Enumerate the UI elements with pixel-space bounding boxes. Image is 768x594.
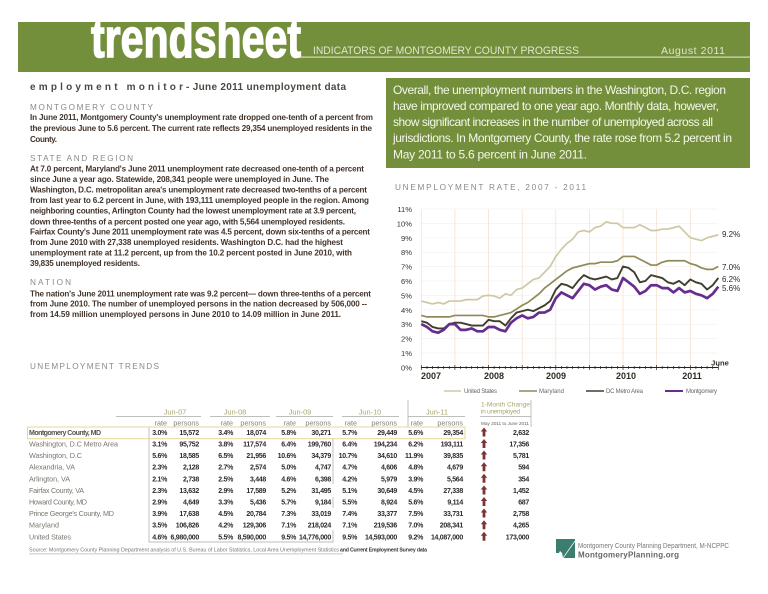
table values: 10.6% <box>278 453 297 460</box>
table values: 34,610 <box>377 453 397 460</box>
table values: 17,356 <box>509 441 529 448</box>
table values: 193,111 <box>441 441 463 448</box>
table values: 2,128 <box>183 465 199 472</box>
column headers: Jun-09 <box>289 408 311 416</box>
row labels: Alexandria, VA <box>29 463 75 472</box>
x axis: 2011 <box>682 371 702 381</box>
table values: 30,649 <box>377 488 397 495</box>
table values: 5.1% <box>342 488 358 495</box>
callout: summary <box>386 78 750 168</box>
table values: 33,731 <box>443 511 463 518</box>
end-of-line value labels: 6.2% <box>722 275 740 284</box>
column headers: persons <box>305 418 331 428</box>
y axis labels: 1% <box>401 349 412 358</box>
table values: 3.3% <box>218 499 234 506</box>
y axis labels: 9% <box>401 234 412 243</box>
line: DC Metro Area <box>421 266 718 328</box>
table values: 5.5% <box>342 499 358 506</box>
table values <box>152 430 529 541</box>
y axis labels: 5% <box>401 291 412 300</box>
text block: Nation: NATION <box>30 278 71 287</box>
line: Maryland <box>421 256 718 317</box>
table values: 5.7% <box>281 499 297 506</box>
header date: August 2011 <box>661 45 725 57</box>
chart legend: United States <box>464 389 497 395</box>
table values: 14,087,000 <box>431 534 463 541</box>
table values: 4,265 <box>513 523 529 530</box>
row labels: Prince George's County, MD <box>29 509 114 518</box>
column headers: rate <box>155 418 167 428</box>
table values: 6.4% <box>342 441 358 448</box>
table values: 9,184 <box>315 499 331 506</box>
chart legend: DC Metro Area <box>606 389 644 395</box>
table values: 5.6% <box>408 499 424 506</box>
table heading: UNEMPLOYMENT TRENDS <box>30 362 160 371</box>
icon: up arrows <box>481 428 487 541</box>
table values: 29,449 <box>377 430 397 437</box>
text block: Nation: from 14.59 million unemployed persons in June 2010 to 14.09 million in June 2011. <box>30 310 341 319</box>
table values: 5.6% <box>408 430 424 437</box>
table values: 2.9% <box>218 488 234 495</box>
table values: 687 <box>518 499 529 506</box>
section heading: employment monitor <box>30 82 183 93</box>
table values: 95,752 <box>179 441 199 448</box>
line chart: unemployment rate <box>395 183 740 395</box>
text block: Nation <box>30 278 371 319</box>
table values: 4.5% <box>408 488 424 495</box>
table values: 14,593,000 <box>365 534 397 541</box>
column headers: persons <box>173 418 199 428</box>
table values: 5.6% <box>152 453 168 460</box>
table values: 9,114 <box>447 499 463 506</box>
table values: 21,956 <box>246 453 266 460</box>
x axis: 2009 <box>546 371 566 381</box>
logo: Montgomery Planning <box>556 539 729 560</box>
column headers: rate <box>221 418 233 428</box>
table values: 1,452 <box>513 488 529 495</box>
text block: State and Region: Fairfax County's June 2011 unemployment rate was 4.5 percent, down six-tenths of a percent <box>30 228 370 237</box>
table values: 2.1% <box>152 476 168 483</box>
end-of-line value labels: 5.6% <box>722 284 740 293</box>
row labels <box>29 430 118 541</box>
column headers: persons <box>240 418 266 428</box>
column headers: Jun-07 <box>164 408 186 416</box>
table values: 10.7% <box>339 453 358 460</box>
table values: 117,574 <box>243 441 266 448</box>
table values: 2.3% <box>152 465 168 472</box>
y axis labels: 10% <box>397 219 412 228</box>
table values: 2,758 <box>513 511 529 518</box>
row labels: Arlington, VA <box>29 474 70 483</box>
text block: State and Region: from last year to 6.2 percent in June, with 193,111 unemployed people in the region. Among <box>30 196 369 205</box>
table values: 7.1% <box>342 523 358 530</box>
end-of-line value labels <box>722 230 740 293</box>
table values: 17,638 <box>179 511 199 518</box>
table values: 8,590,000 <box>238 534 266 541</box>
data lines <box>421 222 718 333</box>
row labels: Maryland <box>29 521 59 530</box>
text block: State and Region: At 7.0 percent, Maryland's June 2011 unemployment rate decreased one-tenth of a percent <box>30 164 364 174</box>
y axis labels: 6% <box>401 277 412 286</box>
text block: State and Region: since June a year ago. Statewide, 208,341 people were unemployed in June. The <box>30 175 329 184</box>
table values: 7.1% <box>281 523 297 530</box>
table values: 5.5% <box>218 534 234 541</box>
text block: Montgomery County <box>30 103 373 144</box>
table values: 3.1% <box>152 441 168 448</box>
chart heading: UNEMPLOYMENT RATE, 2007 - 2011 <box>395 183 586 192</box>
text block: Montgomery County: In June 2011, Montgomery County's unemployment rate dropped one-tenth of a percent from <box>30 113 373 122</box>
text block: Montgomery County: County. <box>30 135 57 144</box>
table values: 3,448 <box>250 476 266 483</box>
header banner <box>18 7 750 72</box>
column headers: Jun-10 <box>359 408 381 416</box>
table values: 7.0% <box>408 523 424 530</box>
table values: 5,979 <box>381 476 397 483</box>
table values: 4,649 <box>183 499 199 506</box>
table values: 5,781 <box>513 453 529 460</box>
title: trendsheet: trendsheet <box>91 7 301 69</box>
table values: 4.8% <box>408 465 424 472</box>
table values: 106,826 <box>176 523 199 530</box>
text block: Montgomery County: the previous June to 5.6 percent. The current rate reflects 29,354 unemployed residents in the <box>30 124 372 133</box>
table values: 3.9% <box>152 511 168 518</box>
table values: 4,747 <box>315 465 331 472</box>
column headers: rate <box>345 418 357 428</box>
table values: 3.4% <box>218 430 234 437</box>
x axis: 2008 <box>484 371 504 381</box>
icon: logo mark <box>556 539 575 558</box>
table values: 594 <box>518 465 529 472</box>
header subtitle: INDICATORS OF MONTGOMERY COUNTY PROGRESS <box>313 45 579 57</box>
y axis labels: 0% <box>401 363 412 372</box>
y axis labels: 4% <box>401 306 412 315</box>
column headers: Jun-08 <box>224 408 246 416</box>
table values: 5.8% <box>281 430 297 437</box>
table values: 4.5% <box>218 511 234 518</box>
y axis labels: 7% <box>401 263 412 272</box>
y axis labels: 3% <box>401 320 412 329</box>
text block: Montgomery County: MONTGOMERY COUNTY <box>30 103 154 112</box>
column headers: rate <box>411 418 423 428</box>
table values: 8,924 <box>381 499 397 506</box>
table values: 6,980,000 <box>171 534 199 541</box>
table values: 9.2% <box>408 534 424 541</box>
table values: 4,679 <box>447 465 463 472</box>
table values: 2.7% <box>218 465 234 472</box>
table values: 33,019 <box>311 511 331 518</box>
table values: 194,234 <box>374 441 397 448</box>
table values: 5,564 <box>447 476 463 483</box>
chart legend: Maryland <box>539 389 564 395</box>
table values: 30,271 <box>311 430 331 437</box>
table values: 9.5% <box>342 534 358 541</box>
table values: 4.6% <box>152 534 168 541</box>
table values: 31,495 <box>311 488 331 495</box>
table values: 13,632 <box>179 488 199 495</box>
column headers: persons <box>437 418 463 428</box>
table values: 4.7% <box>342 465 358 472</box>
text block: Nation: The nation's June 2011 unemployment rate was 9.2 percent— down three-tenths of a percent <box>30 289 371 298</box>
table values: 11.9% <box>405 453 424 460</box>
line: United States <box>421 222 718 304</box>
row labels: Howard County, MD <box>29 497 87 506</box>
table values: 3.8% <box>218 441 234 448</box>
table values: 2.3% <box>152 488 168 495</box>
callout: summary: May 2011 to 5.6 percent in June 2011. <box>393 148 587 162</box>
table values: 27,338 <box>443 488 463 495</box>
text block: State and Region: down three-tenths of a percent posted one year ago, with 5,564 unemployed residents. <box>30 218 345 226</box>
table: unemployment trends <box>28 362 531 555</box>
column headers: May 2011 to June 2011 <box>481 421 529 427</box>
source note: and Current Employment Survey data <box>340 548 427 554</box>
table values: 218,024 <box>308 523 331 530</box>
text block: State and Region <box>30 154 370 268</box>
y axis labels: 11% <box>397 205 412 214</box>
table values: 2,574 <box>250 465 266 472</box>
table values: 5.2% <box>281 488 297 495</box>
table values: 2.5% <box>218 476 234 483</box>
table values: 6.4% <box>281 441 297 448</box>
callout: summary: show significant increases in the number of unemployed across all <box>393 115 713 129</box>
callout: summary: have improved compared to one year ago. Monthly data, however, <box>393 99 719 113</box>
end-of-line value labels: 7.0% <box>722 263 740 272</box>
table values: 2,738 <box>183 476 199 483</box>
column headers <box>155 402 530 428</box>
table values: 4,606 <box>381 465 397 472</box>
table values: 199,760 <box>308 441 331 448</box>
text block: Nation: from June 2010. The number of unemployed persons in the nation decreased by 506,000 -- <box>30 300 367 309</box>
column headers: Jun-11 <box>426 408 448 416</box>
row labels: United States <box>29 532 71 541</box>
table values: 7.4% <box>342 511 358 518</box>
row labels: Fairfax County, VA <box>29 486 84 495</box>
callout: summary: jurisdictions. In Montgomery County, the rate rose from 5.2 percent in <box>392 131 732 145</box>
table values: 4.2% <box>218 523 234 530</box>
table values: 34,379 <box>311 453 331 460</box>
table values: 18,585 <box>179 453 199 460</box>
text block: State and Region: 39,835 unemployed residents. <box>30 259 140 268</box>
table values: 5.7% <box>342 430 358 437</box>
column headers: persons <box>371 418 397 428</box>
column headers: in unemployed <box>481 408 520 416</box>
table values: 129,306 <box>243 523 266 530</box>
table values: 5,436 <box>250 499 266 506</box>
chart legend: Montgomery <box>686 389 717 395</box>
table values: 219,536 <box>374 523 397 530</box>
table values: 354 <box>518 476 529 483</box>
row labels: Montgomery County, MD <box>29 430 101 437</box>
text block: State and Region: STATE AND REGION <box>30 154 133 163</box>
table values: 3.5% <box>152 523 168 530</box>
text block: State and Region: neighboring counties, Arlington County had the lowest unemployment rate at 3.9 percent, <box>30 206 356 216</box>
x axis: 2007 <box>421 371 441 381</box>
end-of-line value labels: 9.2% <box>722 230 740 239</box>
text block: State and Region: unemployment rate at 11.2 percent, up from the 10.2 percent posted in June 2010, with <box>30 249 352 258</box>
table values: 29,354 <box>443 430 463 437</box>
source note <box>29 548 427 555</box>
y axis labels: 2% <box>401 335 412 344</box>
callout: summary: Overall, the unemployment numbers in the Washington, D.C. region <box>393 83 726 97</box>
column headers: 1-Month Change <box>481 402 530 408</box>
table values: 17,589 <box>246 488 266 495</box>
table values: 3.9% <box>408 476 424 483</box>
section heading <box>30 82 346 93</box>
text block: State and Region: from June 2010 with 27,338 unemployed residents. Washington D.C. had the highest <box>30 238 343 247</box>
x axis <box>421 358 729 381</box>
table values: 33,377 <box>377 511 397 518</box>
row labels: Washington, D.C Metro Area <box>29 439 118 448</box>
table values: 4.2% <box>342 476 358 483</box>
x axis: 2010 <box>616 371 636 381</box>
table values: 20,784 <box>246 511 266 518</box>
y axis labels: 8% <box>401 248 412 257</box>
table values: 14,776,000 <box>299 534 331 541</box>
table values: 3.0% <box>152 430 168 437</box>
table values: 2.9% <box>152 499 168 506</box>
table values: 4.6% <box>281 476 297 483</box>
table values: 2,632 <box>513 430 529 437</box>
panel: employment monitor text <box>30 82 373 319</box>
highlight box: Montgomery row <box>28 427 465 439</box>
row labels: Washington, D.C <box>29 451 82 460</box>
table values: 173,000 <box>506 534 529 541</box>
table values: 9.5% <box>281 534 297 541</box>
table values: 18,074 <box>246 430 266 437</box>
table values: 6,398 <box>315 476 331 483</box>
chart legend <box>444 389 717 395</box>
table values: 7.5% <box>408 511 424 518</box>
table values: 7.3% <box>281 511 297 518</box>
table values: 208,341 <box>440 523 463 530</box>
table values: 15,572 <box>179 430 199 437</box>
source note: Source: Montgomery County Planning Department analysis of U.S. Bureau of Labor Statistics, Local Area Unemployment Statistics <box>29 548 339 554</box>
x axis: June <box>711 358 729 368</box>
logo: Montgomery Planning: MontgomeryPlanning.org <box>578 550 679 560</box>
section heading: - June 2011 unemployment data <box>186 82 346 93</box>
y axis labels <box>397 205 412 372</box>
logo: Montgomery Planning: Montgomery County Planning Department, M-NCPPC <box>578 543 729 550</box>
table values: 6.5% <box>218 453 234 460</box>
table values: 39,835 <box>443 453 463 460</box>
text block: State and Region: Washington, D.C. metropolitan area's unemployment rate decreased two-tenths of a percent <box>30 186 367 195</box>
column headers: rate <box>284 418 296 428</box>
table values: 5.0% <box>281 465 297 472</box>
table values: 6.2% <box>408 441 424 448</box>
line: Montgomery <box>421 278 718 333</box>
